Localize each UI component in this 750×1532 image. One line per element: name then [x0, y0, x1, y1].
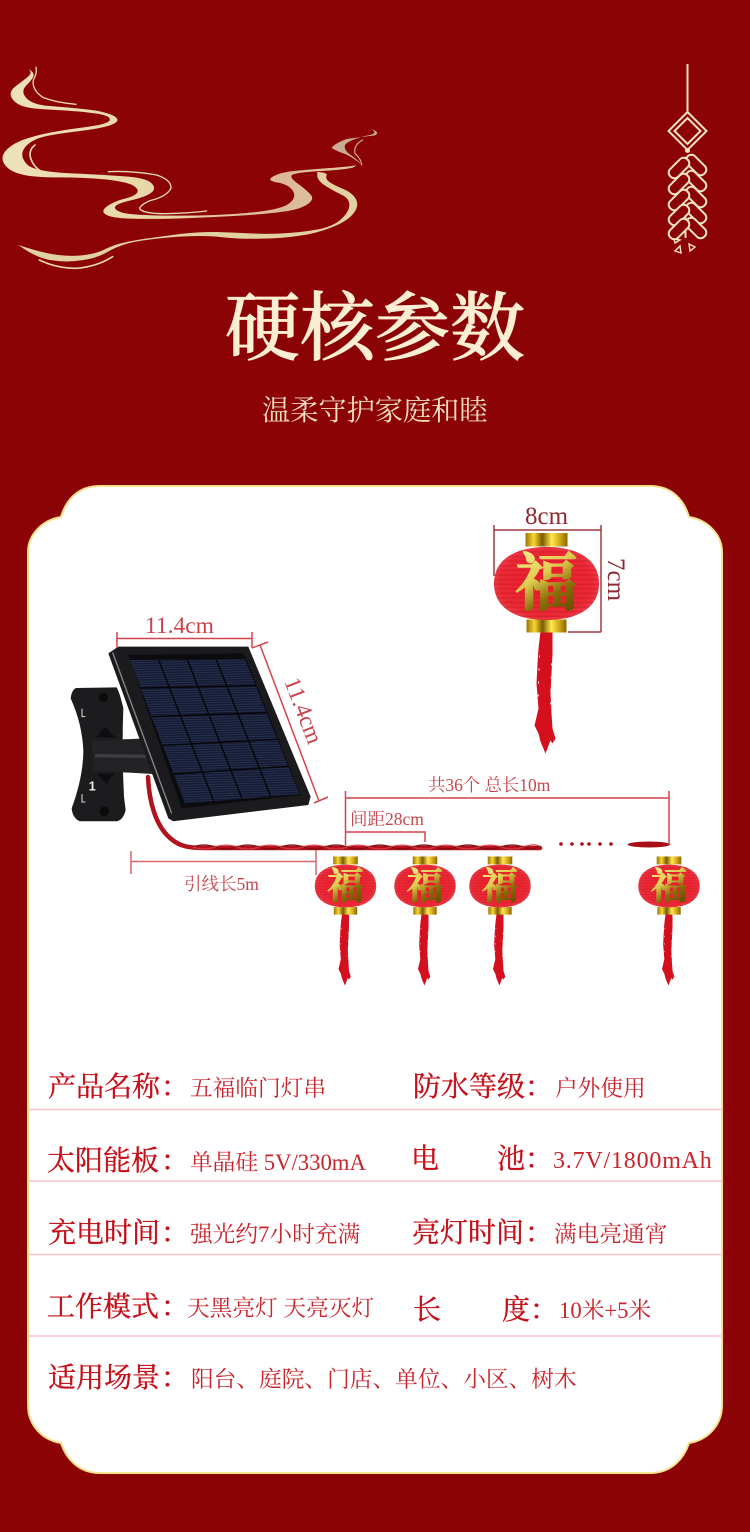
dimension: spacing 28cm — [346, 809, 425, 842]
dimension: lead wire 5m — [131, 850, 316, 894]
dimension: total length 10m: 共36个 总长10m — [428, 775, 551, 795]
icon: hanging firecracker — [667, 64, 708, 253]
dimension: spacing 28cm: 间距28cm — [350, 809, 424, 829]
row: length: ： — [530, 1288, 558, 1328]
small lantern 4 — [638, 856, 700, 985]
row: length: 度 — [502, 1294, 530, 1326]
row: working mode: 天黑亮灯 天亮灭灯 — [187, 1296, 374, 1321]
red cable — [148, 777, 540, 849]
row: battery: 池 — [497, 1143, 525, 1175]
dimension: panel height 11.4cm: 11.4cm — [278, 674, 327, 748]
row: product name: 产品名称 — [48, 1071, 161, 1103]
row: battery: ： — [525, 1137, 553, 1177]
row: lighting time: 满电亮通宵 — [554, 1222, 667, 1247]
small lantern 4: 福 — [651, 866, 687, 906]
row: length: 10米+5米 — [559, 1298, 651, 1323]
dimension: lead wire 5m: 引线长5m — [184, 874, 259, 894]
decoration: golden swirling clouds — [2, 67, 377, 268]
large lantern — [494, 533, 599, 754]
panel: white product card — [28, 486, 722, 1473]
row: product name: ： — [161, 1065, 189, 1105]
dimension: lantern 8cm by 7cm: 7cm — [602, 558, 629, 602]
row: lighting time: ： — [525, 1211, 553, 1251]
row: battery: 电 — [411, 1143, 439, 1175]
spec table — [29, 1065, 721, 1396]
solar panel with bracket — [71, 647, 311, 821]
row: applicable scenes: ： — [161, 1356, 189, 1396]
row: lighting time: 亮灯时间 — [412, 1217, 524, 1249]
small lantern 1 — [315, 856, 376, 985]
dimension: panel width 11.4cm — [117, 613, 252, 648]
row: solar panel: 太阳能板 — [47, 1145, 159, 1177]
title: 硬核参数 — [225, 288, 525, 371]
icon: wall bracket: 1 — [89, 779, 96, 793]
small lantern 3: 福 — [482, 866, 518, 906]
small lantern 2: 福 — [407, 866, 443, 906]
row: solar panel: 单晶硅 5V/330mA — [190, 1150, 366, 1175]
small lantern 1: 福 — [327, 866, 364, 906]
row: charging time: 充电时间 — [48, 1217, 160, 1249]
row: waterproof: 户外使用 — [555, 1076, 646, 1101]
row: applicable scenes: 适用场景 — [48, 1362, 160, 1394]
subtitle: 温柔守护家庭和睦 — [262, 395, 488, 427]
dimension: total length 10m — [346, 775, 669, 845]
large lantern: 福 — [515, 550, 578, 618]
row: product name: 五福临门灯串 — [190, 1076, 326, 1101]
small lantern 3 — [469, 856, 531, 985]
dimension: panel width 11.4cm: 11.4cm — [145, 613, 214, 639]
ellipsis dots and cable end — [559, 842, 670, 848]
dimension: panel height 11.4cm — [252, 642, 328, 803]
row: applicable scenes: 阳台、庭院、门店、单位、小区、树木 — [191, 1367, 577, 1392]
row: charging time: 强光约7小时充满 — [190, 1222, 360, 1247]
icon: solar panel — [108, 647, 311, 821]
row: battery: 3.7V/1800mAh — [553, 1148, 713, 1174]
icon: wall bracket — [71, 687, 153, 821]
row: charging time: ： — [161, 1211, 189, 1251]
row: solar panel: ： — [161, 1139, 189, 1179]
dimension: lantern 8cm by 7cm — [494, 503, 629, 632]
dimension: lantern 8cm by 7cm: 8cm — [525, 503, 569, 530]
row: working mode: ： — [161, 1285, 189, 1325]
row: waterproof: 防水等级 — [413, 1071, 525, 1103]
row: working mode: 工作模式 — [47, 1291, 159, 1323]
small lantern 2 — [394, 856, 456, 985]
row: waterproof: ： — [525, 1065, 553, 1105]
row: length: 长 — [413, 1294, 441, 1326]
